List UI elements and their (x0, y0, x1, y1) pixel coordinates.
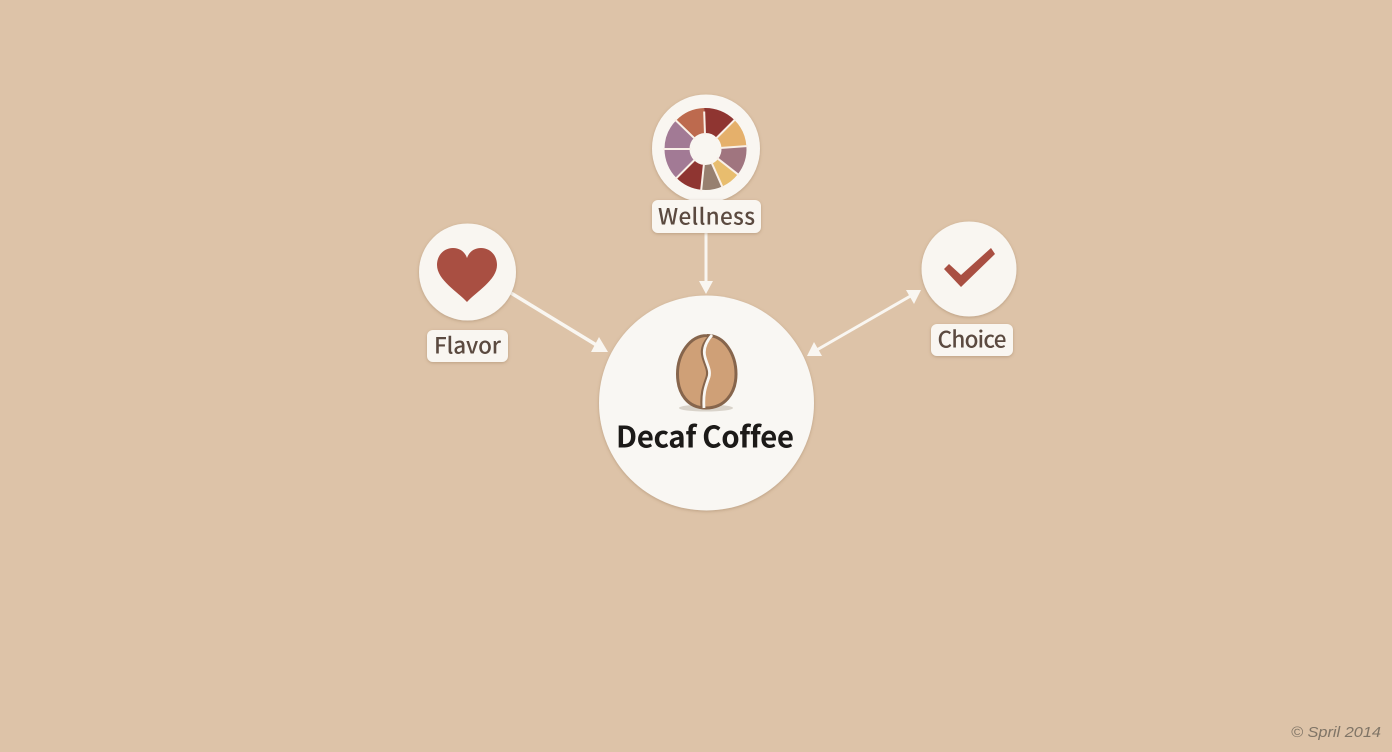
arrow: wellness to decaf coffee (699, 232, 713, 294)
arrow: choice and decaf coffee, two-way (807, 290, 921, 356)
icon: coffee bean (678, 335, 736, 412)
copyright note: © Spril 2014 (1291, 724, 1381, 741)
choice label: Choice (938, 322, 1006, 354)
main circle (599, 296, 814, 510)
wellness label: Wellness (658, 200, 755, 232)
flavor label: Flavor (434, 328, 502, 360)
icon: check mark (944, 248, 995, 287)
arrow: flavor to decaf coffee (511, 293, 608, 352)
node: decaf coffee (599, 296, 814, 510)
node: wellness (652, 94, 761, 233)
node: choice (922, 222, 1016, 356)
choice circle (922, 222, 1016, 316)
flavor circle (419, 224, 516, 320)
node: flavor (419, 224, 516, 362)
icon: heart (437, 248, 497, 302)
title: Decaf Coffee (616, 414, 794, 456)
icon: colour wheel (663, 109, 748, 191)
wellness circle (652, 94, 760, 202)
